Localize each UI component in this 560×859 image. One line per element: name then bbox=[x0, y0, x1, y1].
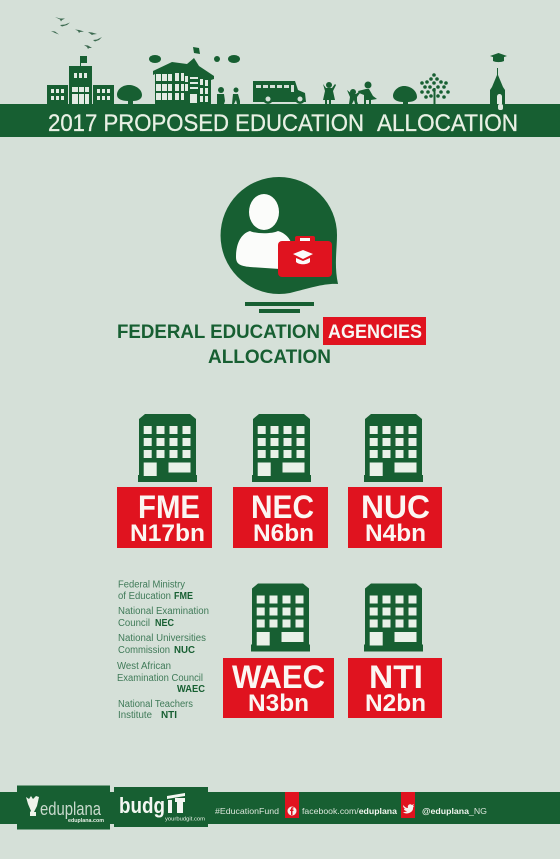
text block: agency legend: Commission bbox=[118, 645, 170, 656]
text block: agency legend: National Examination bbox=[118, 606, 209, 617]
panel: WAEC bbox=[223, 584, 334, 718]
icon: tree bbox=[117, 85, 142, 104]
text block: agency legend: Federal Ministry bbox=[118, 580, 185, 590]
panel: NTI: NTI bbox=[369, 659, 423, 695]
logo: budgit: budg bbox=[119, 793, 165, 818]
text block: agency legend: FME bbox=[174, 591, 193, 602]
text block: agency legend: NUC bbox=[174, 645, 195, 656]
title: 2017 PROPOSED EDUCATION bbox=[48, 110, 364, 137]
icon: children playing bbox=[323, 82, 377, 104]
logo: budgit bbox=[114, 787, 208, 827]
heading: federal education agencies allocation: FEDERAL EDUCATION bbox=[117, 322, 320, 343]
text block: agency legend: West African bbox=[117, 661, 171, 672]
logo: budgit: yourbudgit.com bbox=[165, 816, 205, 822]
icon: birds bbox=[51, 17, 102, 49]
panel: NUC: NUC bbox=[361, 489, 430, 525]
icon: graduation tower bbox=[490, 53, 507, 110]
icon: person with red briefcase bbox=[221, 177, 338, 294]
icon: facebook bbox=[285, 792, 299, 818]
panel: NUC bbox=[348, 414, 442, 548]
twitter handle: @eduplana_NG bbox=[422, 806, 487, 816]
panel: NTI: N2bn bbox=[365, 690, 426, 717]
text block: agency legend: National Universities bbox=[118, 633, 206, 644]
top band bbox=[0, 104, 560, 137]
panel: NEC bbox=[233, 414, 328, 548]
text block: agency legend: NTI bbox=[161, 710, 177, 721]
text block: agency legend: National Teachers bbox=[118, 699, 193, 710]
panel: NEC: N6bn bbox=[253, 520, 314, 547]
icon: school bus bbox=[253, 81, 306, 106]
icon: round tree bbox=[393, 86, 417, 104]
text block: agency legend bbox=[117, 580, 209, 721]
facebook handle: facebook.com/eduplana bbox=[302, 806, 397, 816]
skyline illustration bbox=[47, 17, 507, 110]
text block: agency legend: NEC bbox=[155, 618, 174, 629]
panel: WAEC: WAEC bbox=[232, 659, 325, 695]
footer band bbox=[0, 792, 560, 824]
icon: walking children bbox=[217, 87, 240, 104]
icon: twitter bbox=[401, 792, 415, 818]
text block: agency legend: Council bbox=[118, 618, 150, 629]
graduation tower door bbox=[498, 104, 503, 110]
panel: FME bbox=[117, 414, 212, 548]
panel: NTI bbox=[348, 584, 442, 718]
text block: agency legend: Examination Council bbox=[117, 673, 203, 684]
heading: federal education agencies allocation: AGENCIES bbox=[328, 322, 422, 343]
panel: NEC: NEC bbox=[251, 489, 314, 525]
text block: agency legend: of Education bbox=[118, 591, 171, 602]
heading: federal education agencies allocation bbox=[117, 317, 426, 368]
panel: WAEC: N3bn bbox=[248, 690, 309, 717]
text block: agency legend: WAEC bbox=[177, 684, 205, 695]
text block: agency legend: Institute bbox=[118, 710, 152, 721]
heading: federal education agencies allocation: ALLOCATION bbox=[208, 347, 331, 368]
icon: leafy tree bbox=[420, 73, 450, 104]
logo: eduplana: eduplana bbox=[40, 799, 102, 819]
title: ALLOCATION bbox=[377, 110, 518, 137]
panel: FME: FME bbox=[138, 489, 200, 525]
panel: NUC: N4bn bbox=[365, 520, 426, 547]
panel: FME: N17bn bbox=[130, 520, 205, 547]
decorative lines under icon bbox=[245, 302, 314, 313]
hashtag: #EducationFund bbox=[215, 806, 279, 816]
logo: eduplana: eduplana.com bbox=[68, 818, 104, 824]
icon: large school bbox=[149, 47, 240, 104]
icon: city school building bbox=[47, 56, 114, 104]
logo: eduplana bbox=[17, 786, 110, 830]
